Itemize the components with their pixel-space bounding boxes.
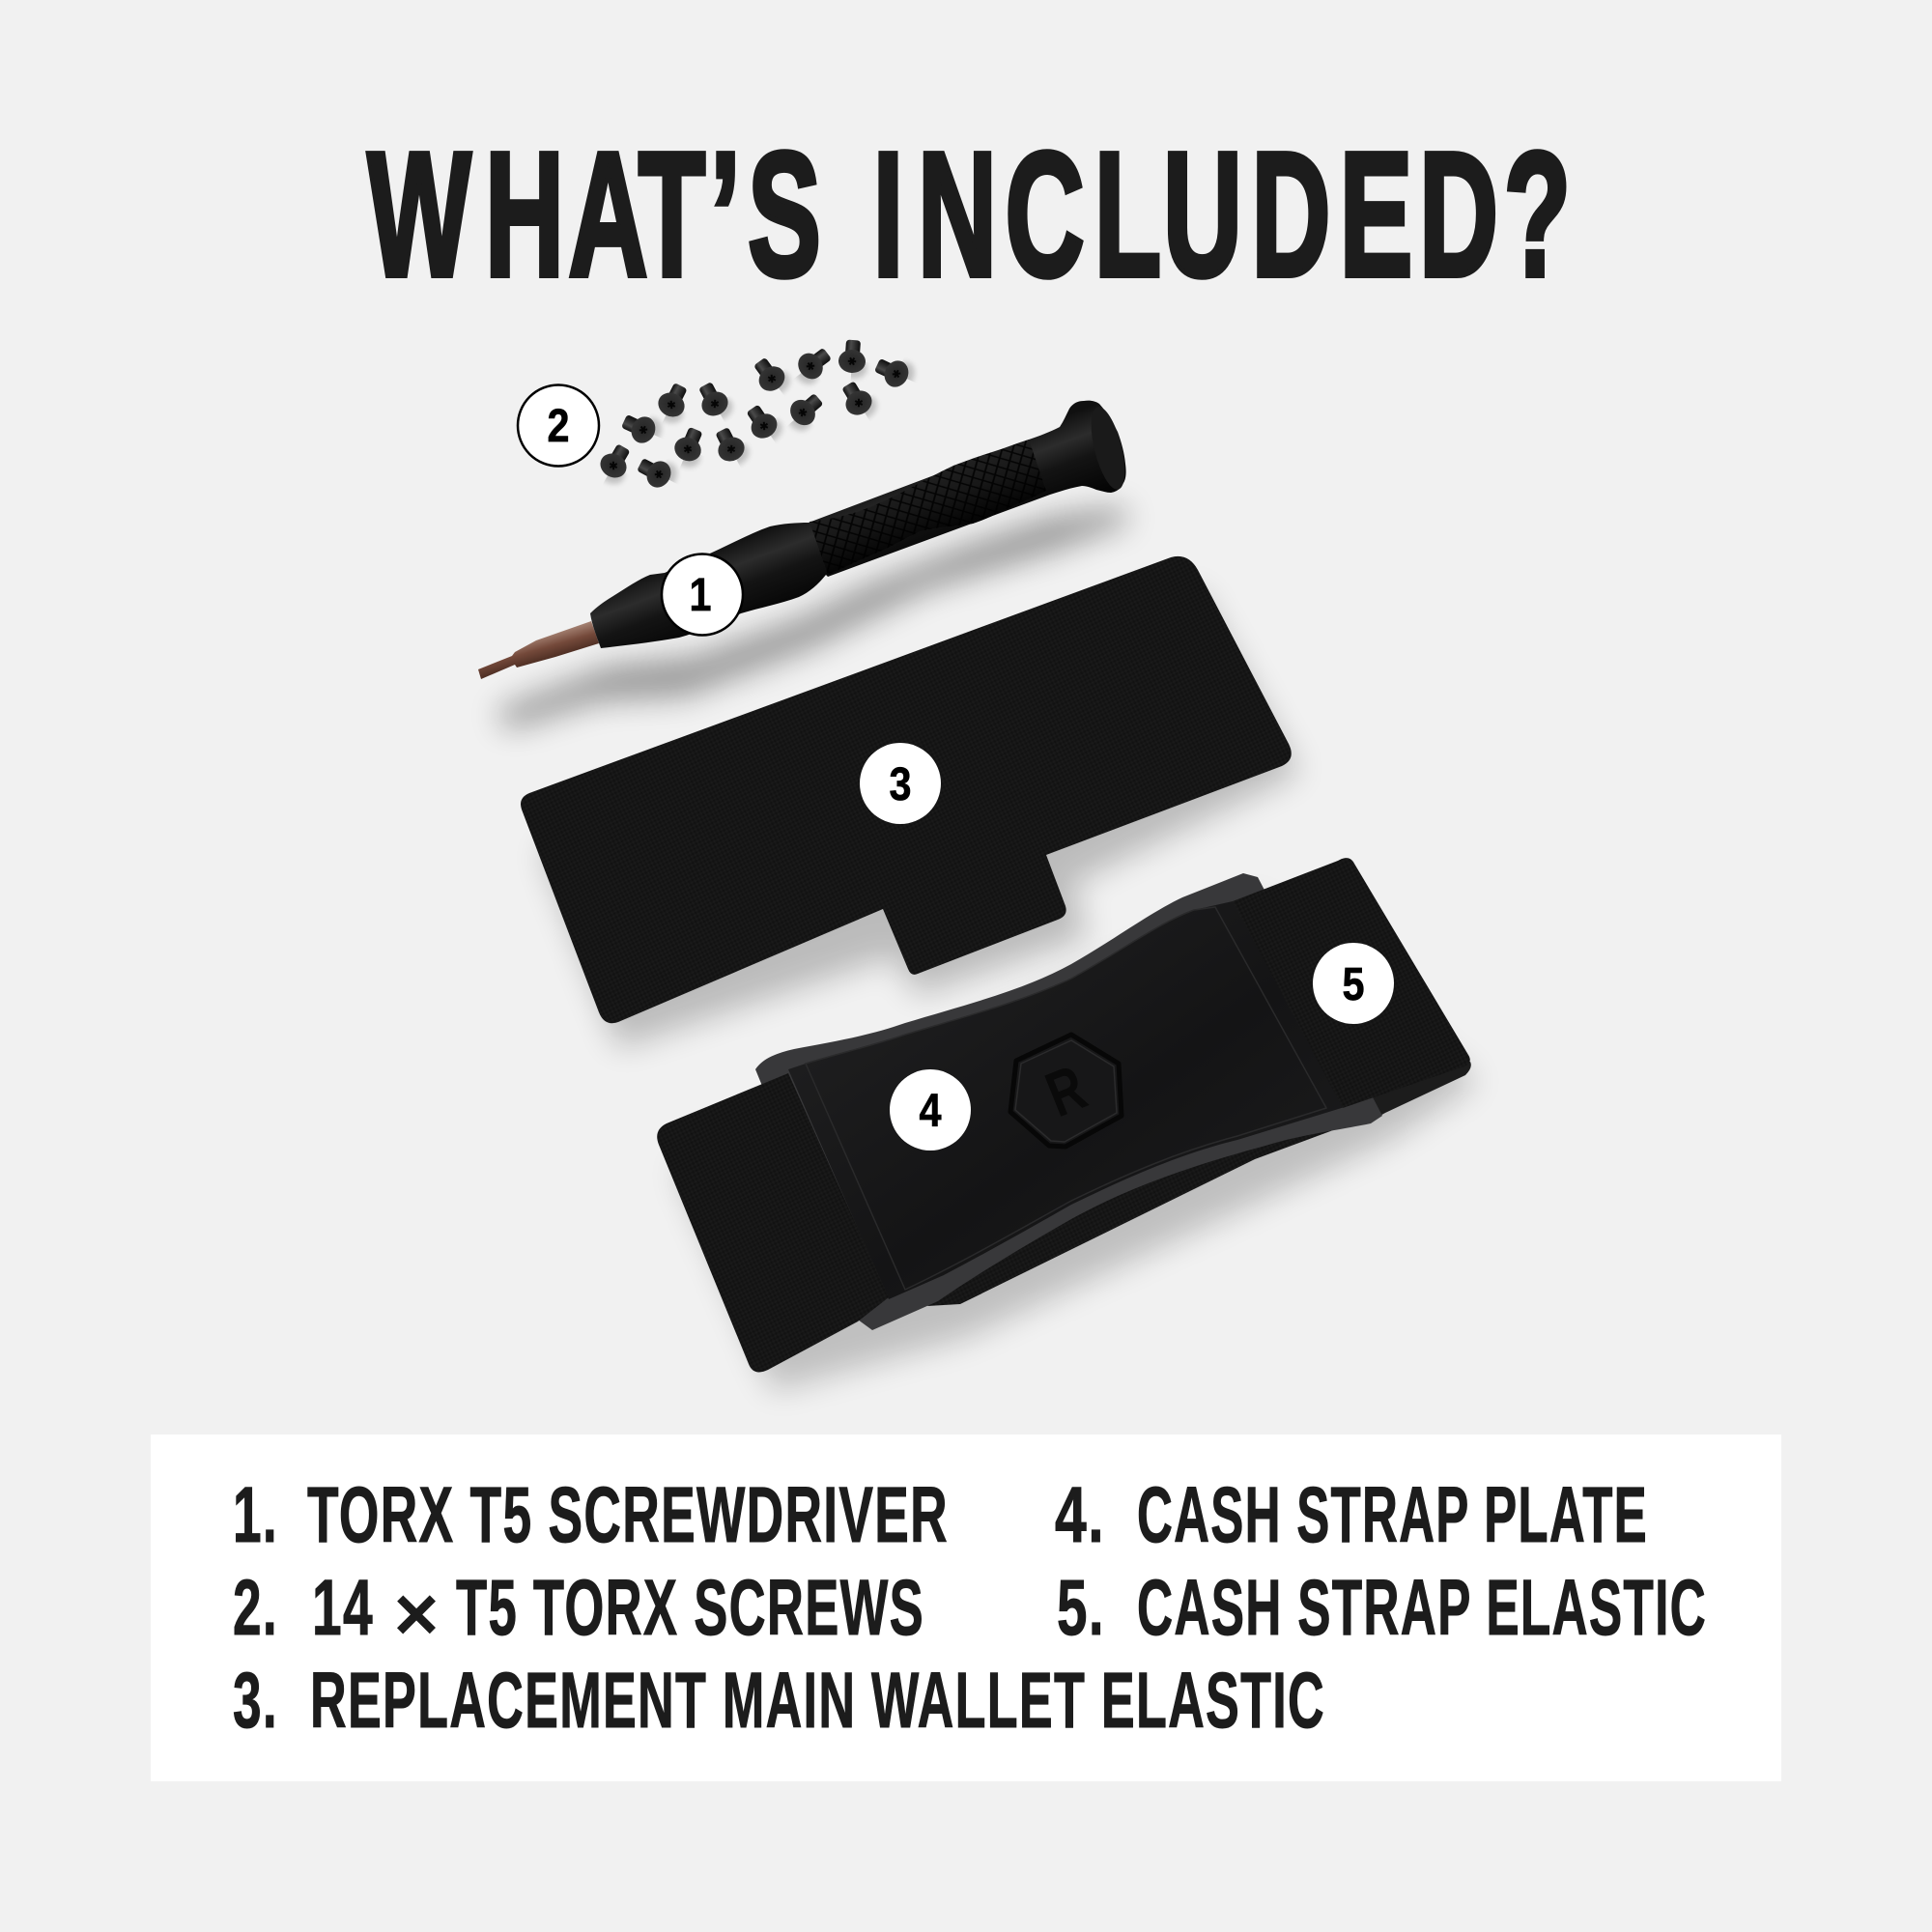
item 2: × [394, 1571, 439, 1657]
item 2: T5 TORX SCREWS [456, 1564, 924, 1652]
callout 1: 1 [690, 570, 711, 621]
back elastic [927, 1130, 1333, 1306]
item 1: 1. [233, 1471, 278, 1559]
item 2 [233, 1564, 924, 1657]
callout 5: 5 [1343, 959, 1364, 1010]
callout 3: 3 [889, 759, 912, 810]
item 5 [1057, 1564, 1707, 1652]
logo badge: R [1037, 1051, 1095, 1130]
icon: cash strap [657, 858, 1478, 1391]
right elastic [1233, 858, 1470, 1108]
item 2: 2. [233, 1564, 278, 1652]
icon: replacement elastic [521, 556, 1299, 1048]
callout 2: 2 [547, 401, 570, 452]
panel: parts list [151, 1435, 1781, 1781]
screwdriver knurled grip [810, 440, 1046, 575]
item 1: TORX T5 SCREWDRIVER [307, 1471, 949, 1559]
item 1 [233, 1471, 949, 1559]
right rear elastic fold [1357, 1062, 1471, 1121]
item 3: 3. [233, 1657, 278, 1745]
callout 4 [890, 1069, 971, 1151]
left elastic [657, 1073, 889, 1372]
screwdriver grip shading [810, 440, 1046, 575]
screwdriver bit [478, 621, 599, 679]
screwdriver handle [590, 401, 1126, 648]
item 3 [233, 1657, 1325, 1745]
plate rim [755, 873, 1382, 1330]
callout 3 [860, 743, 941, 824]
callout 1 [662, 554, 743, 636]
callout 2 [518, 384, 599, 466]
icon: screws [593, 339, 919, 495]
plate inner line [806, 907, 1326, 1290]
callout 4: 4 [920, 1086, 942, 1137]
title: WHAT’S INCLUDED? [367, 116, 1571, 314]
icon: screwdriver [478, 401, 1131, 729]
logo badge [1010, 1035, 1122, 1147]
item 2: 14 [312, 1564, 374, 1652]
item 3: REPLACEMENT MAIN WALLET ELASTIC [310, 1657, 1325, 1745]
screwdriver butt cap [1085, 404, 1131, 493]
item 4 [1055, 1471, 1648, 1559]
callout 5 [1313, 943, 1394, 1024]
plate face [788, 901, 1345, 1299]
item 4: 4. [1055, 1471, 1105, 1559]
item 5: 5. [1057, 1564, 1105, 1652]
